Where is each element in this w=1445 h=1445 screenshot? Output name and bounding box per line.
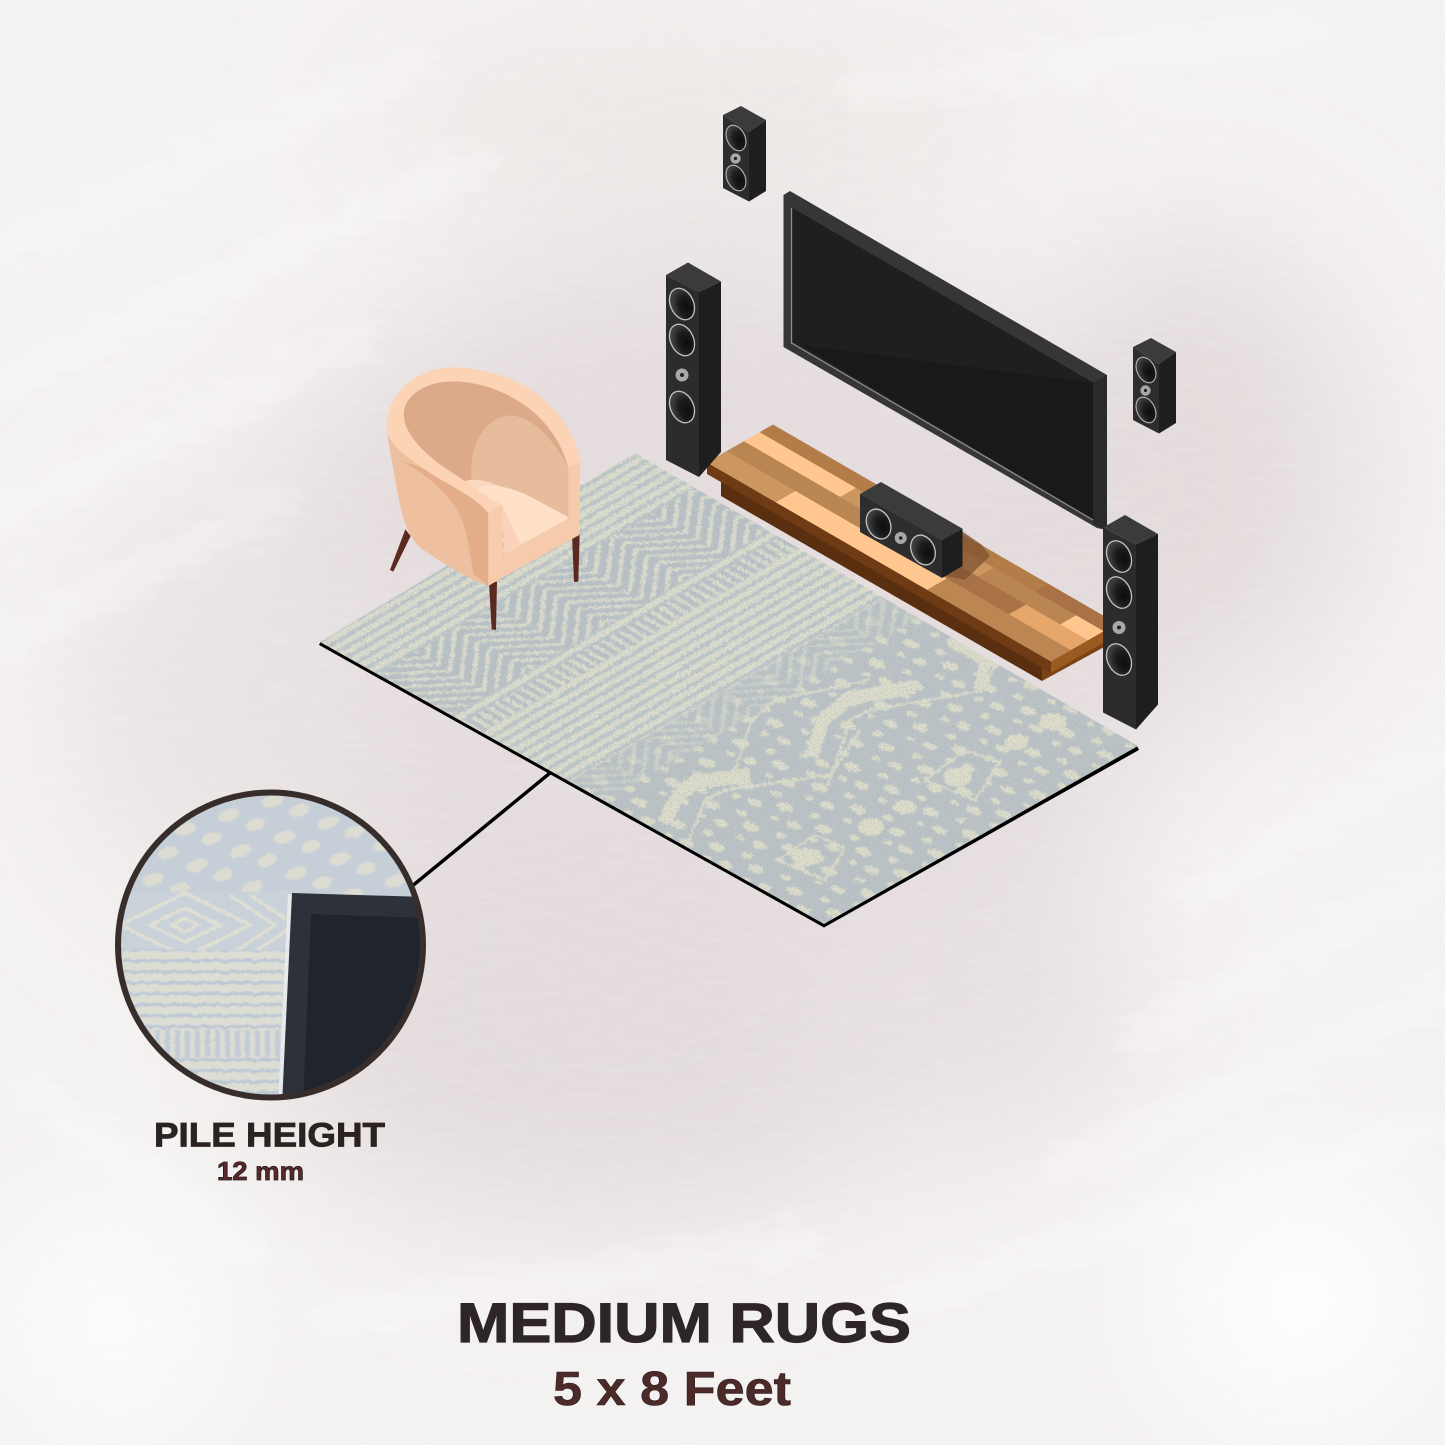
speaker: rear left small [722, 106, 766, 202]
rug patterned surface [307, 448, 1157, 936]
chair legs [390, 529, 580, 630]
subtitle: size: 5 x 8 Feet [553, 1363, 791, 1416]
television [784, 191, 1107, 530]
armchair [387, 367, 580, 630]
shelf underside [721, 470, 1042, 681]
pile height heading: PILE HEIGHT [154, 1116, 385, 1154]
detail lens: pile height close-up [115, 785, 425, 1105]
callout connector line [411, 773, 550, 887]
lens photo [115, 785, 425, 1105]
chair inner back [400, 381, 568, 523]
lens ring [118, 792, 423, 1098]
speaker: rear right small [1132, 338, 1176, 434]
chair rim [387, 367, 580, 513]
tv shelf: wood planks [707, 425, 1117, 681]
chair outer side [387, 433, 488, 586]
pile height value: 12 mm [217, 1156, 304, 1186]
rug field motifs [664, 640, 1000, 880]
speaker shadow on shelf [942, 531, 990, 580]
speaker: front right tower [1102, 515, 1158, 730]
speaker: front left tower [665, 262, 721, 477]
rug: 5 x 8 feet isometric [307, 448, 1157, 936]
chair front panel [503, 462, 580, 577]
title: medium rugs: MEDIUM RUGS [457, 1291, 911, 1354]
chair arm front [488, 505, 503, 586]
center speaker [860, 482, 962, 578]
rug black edge [320, 643, 1138, 925]
lens rug backing [278, 894, 425, 1105]
callout label: pile height [154, 1116, 385, 1186]
shelf top surface [707, 425, 1117, 662]
chair seat [460, 480, 568, 554]
